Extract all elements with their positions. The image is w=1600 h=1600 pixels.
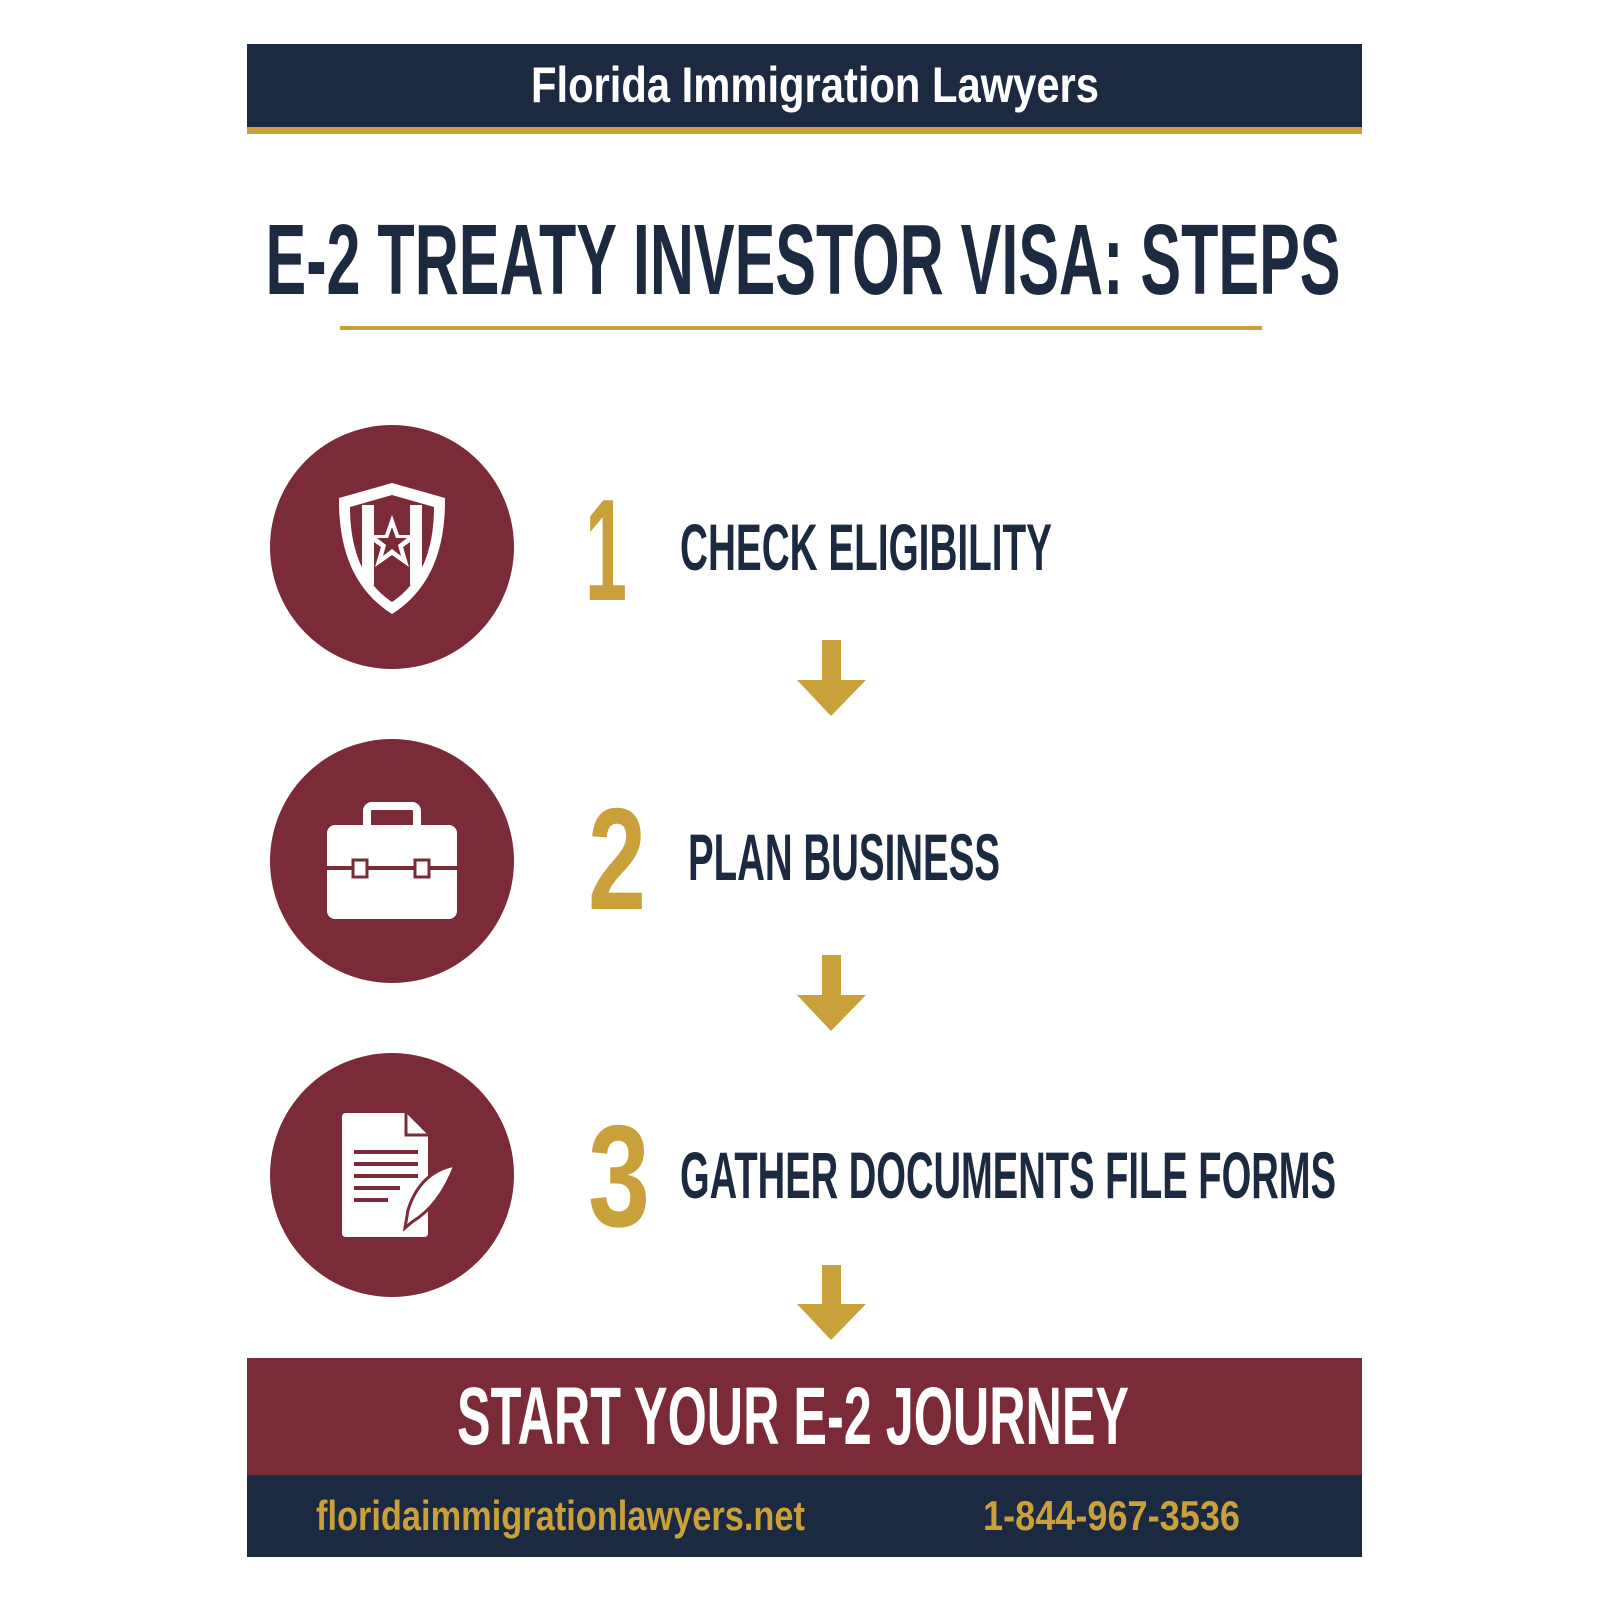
step 1: [270, 425, 1052, 669]
step 3: [270, 1053, 1336, 1297]
number 1: 1: [585, 469, 627, 631]
icon: briefcase: [270, 739, 514, 983]
title underline: [340, 326, 1262, 330]
number 2: 2: [588, 778, 646, 940]
CTA banner: START YOUR E-2 JOURNEY: [457, 1371, 1129, 1462]
label: plan business: PLAN BUSINESS: [688, 820, 1000, 894]
icon: shield: [270, 425, 514, 669]
phone: 1-844-967-3536: [983, 1492, 1240, 1539]
step 2: [270, 739, 1000, 983]
arrow 3: [797, 1265, 866, 1340]
arrow 1: [797, 640, 866, 716]
CTA banner: [247, 1358, 1362, 1476]
footer contact bar: [247, 1475, 1362, 1557]
icon: document with quill: [270, 1053, 514, 1297]
label: check eligibility: CHECK ELIGIBILITY: [680, 510, 1052, 584]
header text: Florida Immigration Lawyers: [531, 57, 1099, 113]
header bar: [247, 44, 1362, 134]
number 3: 3: [588, 1095, 650, 1257]
website: floridaimmigrationlawyers.net: [316, 1492, 805, 1539]
arrow 2: [797, 955, 866, 1031]
